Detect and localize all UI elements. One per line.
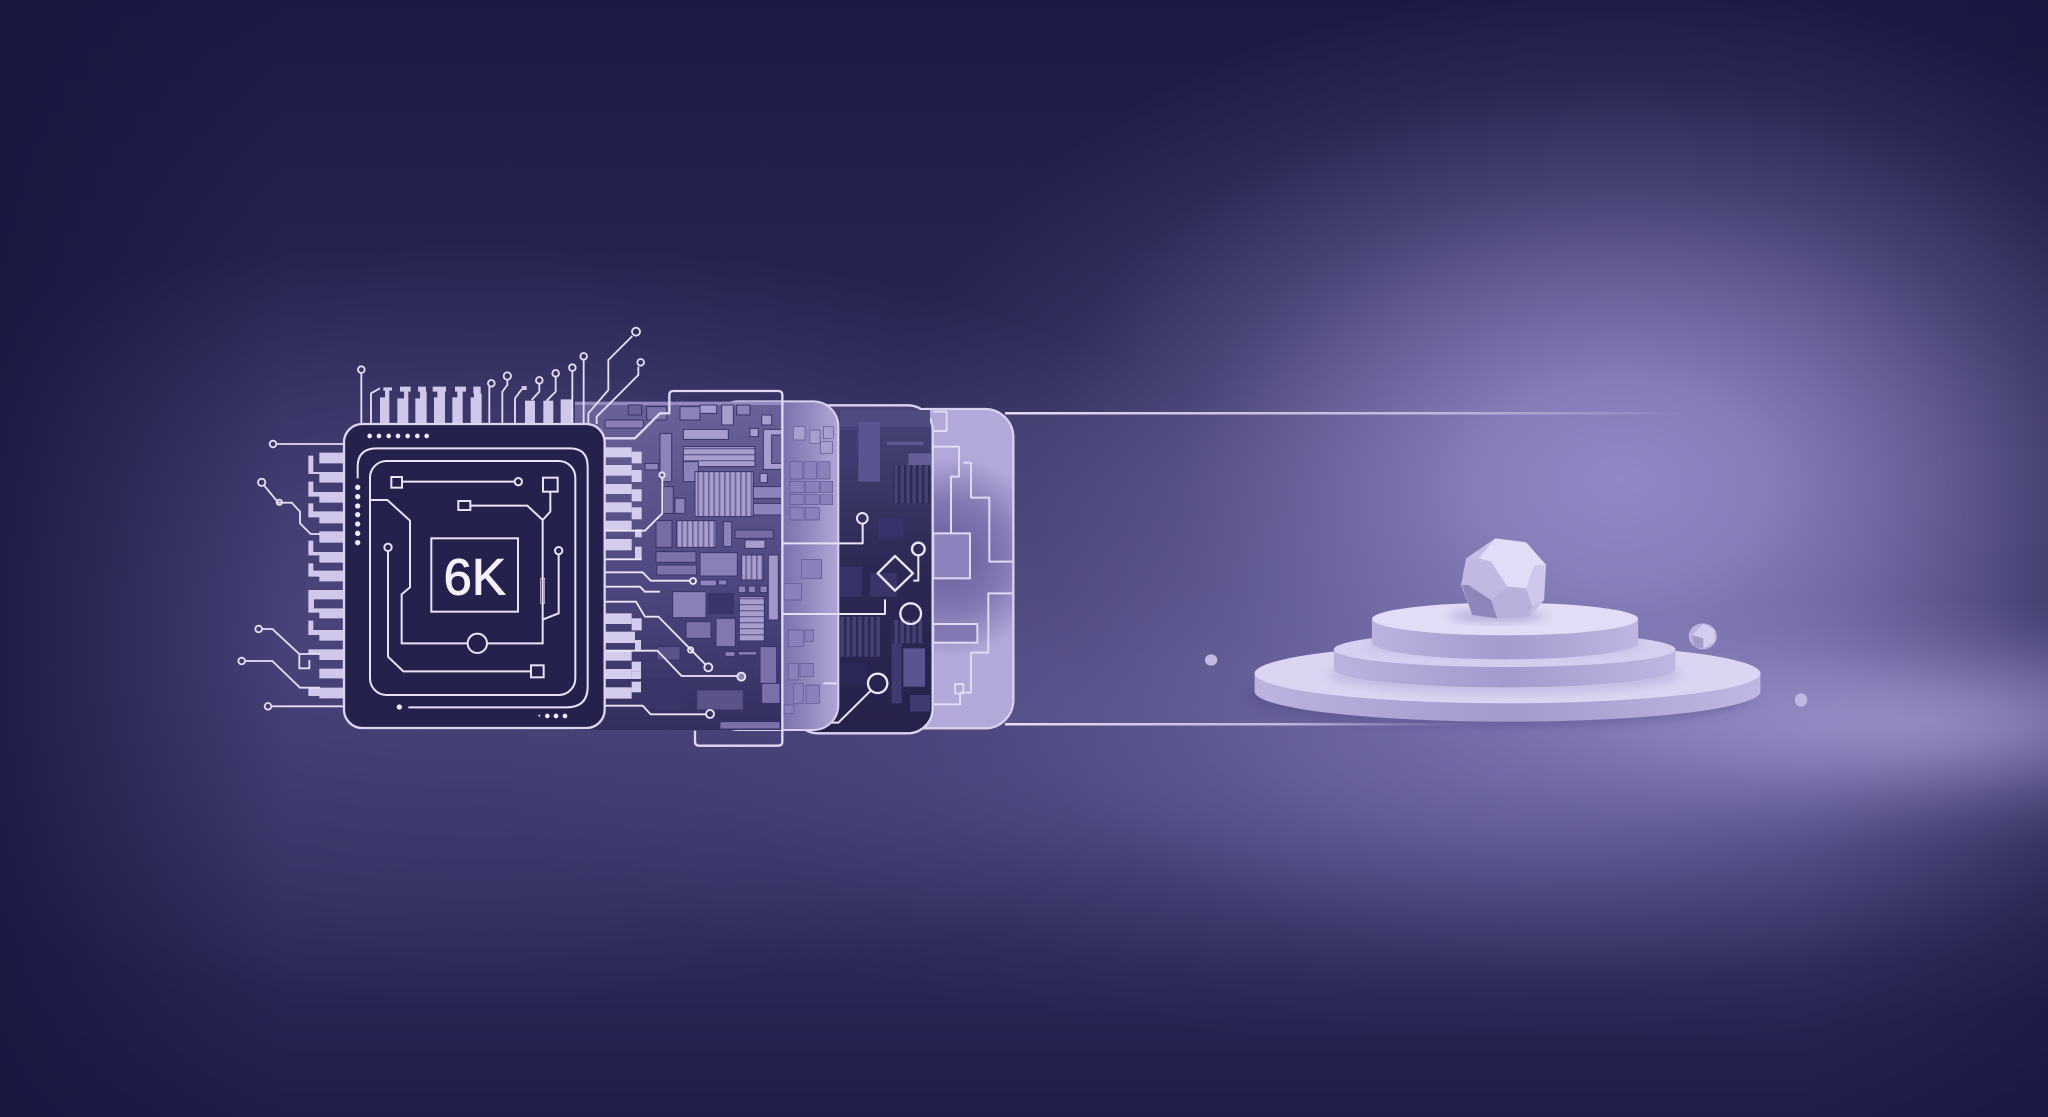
podium with gem (1205, 538, 1807, 727)
podium shadow (1246, 667, 1752, 727)
podium middle disc (1334, 632, 1675, 687)
chip dots (355, 434, 567, 718)
gem (1461, 538, 1546, 618)
beam lines (1005, 412, 1685, 726)
6K label: 6K (444, 548, 506, 605)
panel 2: light tile layer (713, 401, 838, 730)
panel stack (575, 391, 1013, 746)
panel 3: dark circuit layer (783, 405, 933, 733)
chip pins and leads (238, 328, 644, 710)
panel 1: dense circuit layer (575, 391, 783, 746)
pins on chip right side (605, 447, 642, 699)
wires (605, 391, 782, 746)
chip traces (358, 448, 588, 707)
podium bottom disc (1255, 643, 1760, 722)
small stones (1205, 623, 1807, 707)
chip (238, 328, 644, 728)
podium top disc (1372, 603, 1638, 659)
panel 4: light trace layer (897, 409, 1013, 728)
chip body (344, 424, 605, 728)
